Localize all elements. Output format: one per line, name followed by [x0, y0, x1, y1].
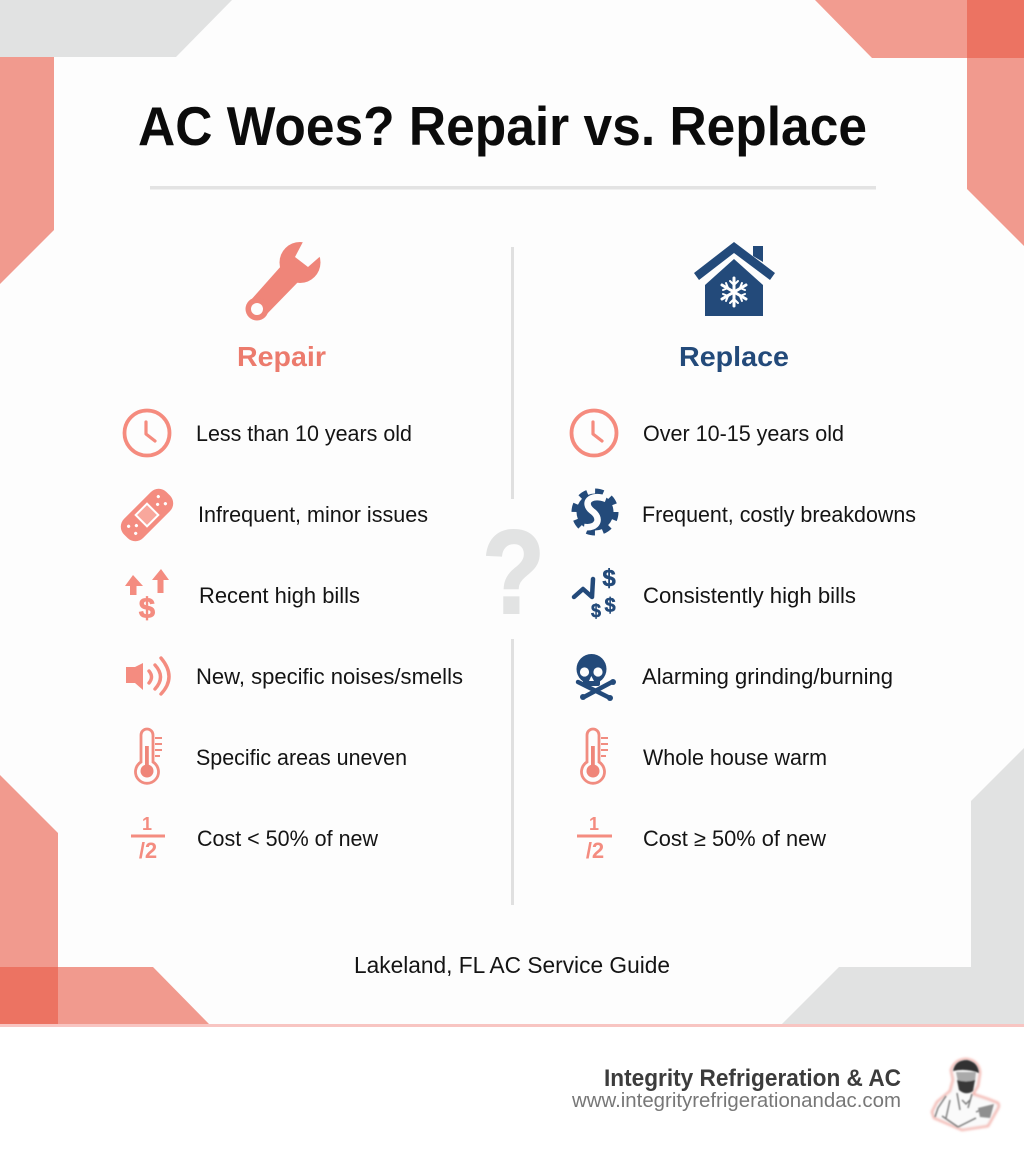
icon: one half: /2 — [139, 838, 157, 863]
row: uneven — [136, 729, 407, 783]
icon: one half: 1 — [142, 814, 152, 834]
icon: house with snowflake — [694, 242, 775, 316]
icon: chart and dollars — [574, 565, 616, 621]
icon: one half: /2 — [586, 838, 604, 863]
row: cost — [131, 814, 378, 863]
corner: top-left shapes — [0, 0, 232, 284]
heading: replace: Replace — [679, 341, 789, 372]
row: warm — [582, 729, 827, 783]
text: cost: Cost < 50% of new — [197, 826, 378, 851]
corner: bottom-left shapes — [0, 775, 209, 1024]
panel: replace — [572, 242, 916, 863]
text: grinding: Alarming grinding/burning — [642, 664, 893, 689]
text: uneven: Specific areas uneven — [196, 745, 407, 770]
text: bills: Consistently high bills — [643, 583, 856, 608]
text: noises: New, specific noises/smells — [196, 664, 463, 689]
icon: bandage — [116, 484, 178, 546]
icon: one half — [131, 814, 165, 863]
row: issues — [116, 484, 428, 546]
icon: technician portrait — [932, 1059, 999, 1130]
icon: arrows and dollar: $ — [139, 593, 155, 625]
footer branding — [571, 1059, 999, 1130]
text: bills: Recent high bills — [199, 583, 360, 608]
icon: chart and dollars: $ — [602, 565, 616, 592]
corner: bottom-right shape — [782, 748, 1024, 1024]
row: age — [572, 410, 844, 456]
icon: clock — [124, 410, 170, 456]
text: breakdowns: Frequent, costly breakdowns — [642, 502, 916, 527]
icon: chart and dollars: $ — [604, 595, 616, 617]
row: grinding — [576, 654, 893, 701]
center divider with question mark: ? — [482, 506, 545, 639]
guide caption: Lakeland, FL AC Service Guide — [354, 952, 670, 978]
icon: speaker — [126, 658, 169, 694]
icon: clock — [572, 410, 616, 456]
company name: Integrity Refrigeration & AC — [604, 1065, 901, 1092]
icon: arrows and dollar — [125, 569, 169, 625]
heading: repair: Repair — [237, 341, 326, 372]
website: www.integrityrefrigerationandac.com — [571, 1090, 901, 1112]
icon: one half: 1 — [589, 814, 599, 834]
text: age: Over 10-15 years old — [643, 421, 844, 446]
icon: wrench — [246, 238, 324, 320]
panel: repair — [116, 238, 463, 863]
icon: thermometer — [136, 729, 162, 783]
icon: one half — [577, 814, 612, 863]
center divider with question mark — [482, 247, 545, 905]
icon: chart and dollars: $ — [591, 601, 601, 621]
row: breakdowns — [575, 492, 916, 532]
icon: gear with dollar — [575, 492, 615, 532]
icon: thermometer — [582, 729, 608, 783]
text: warm: Whole house warm — [643, 745, 827, 770]
row: bills — [125, 569, 360, 625]
icon: skull and crossbones — [576, 654, 616, 701]
row: cost — [577, 814, 826, 863]
row: bills — [574, 565, 856, 621]
text: age: Less than 10 years old — [196, 421, 412, 446]
corner: top-right shapes — [815, 0, 1024, 246]
row: age — [124, 410, 412, 456]
footer rule — [0, 1024, 1024, 1027]
row: noises — [126, 658, 463, 694]
title: AC Woes? Repair vs. Replace — [138, 95, 867, 157]
text: issues: Infrequent, minor issues — [198, 502, 428, 527]
title divider — [150, 186, 876, 190]
text: cost: Cost ≥ 50% of new — [643, 826, 826, 851]
